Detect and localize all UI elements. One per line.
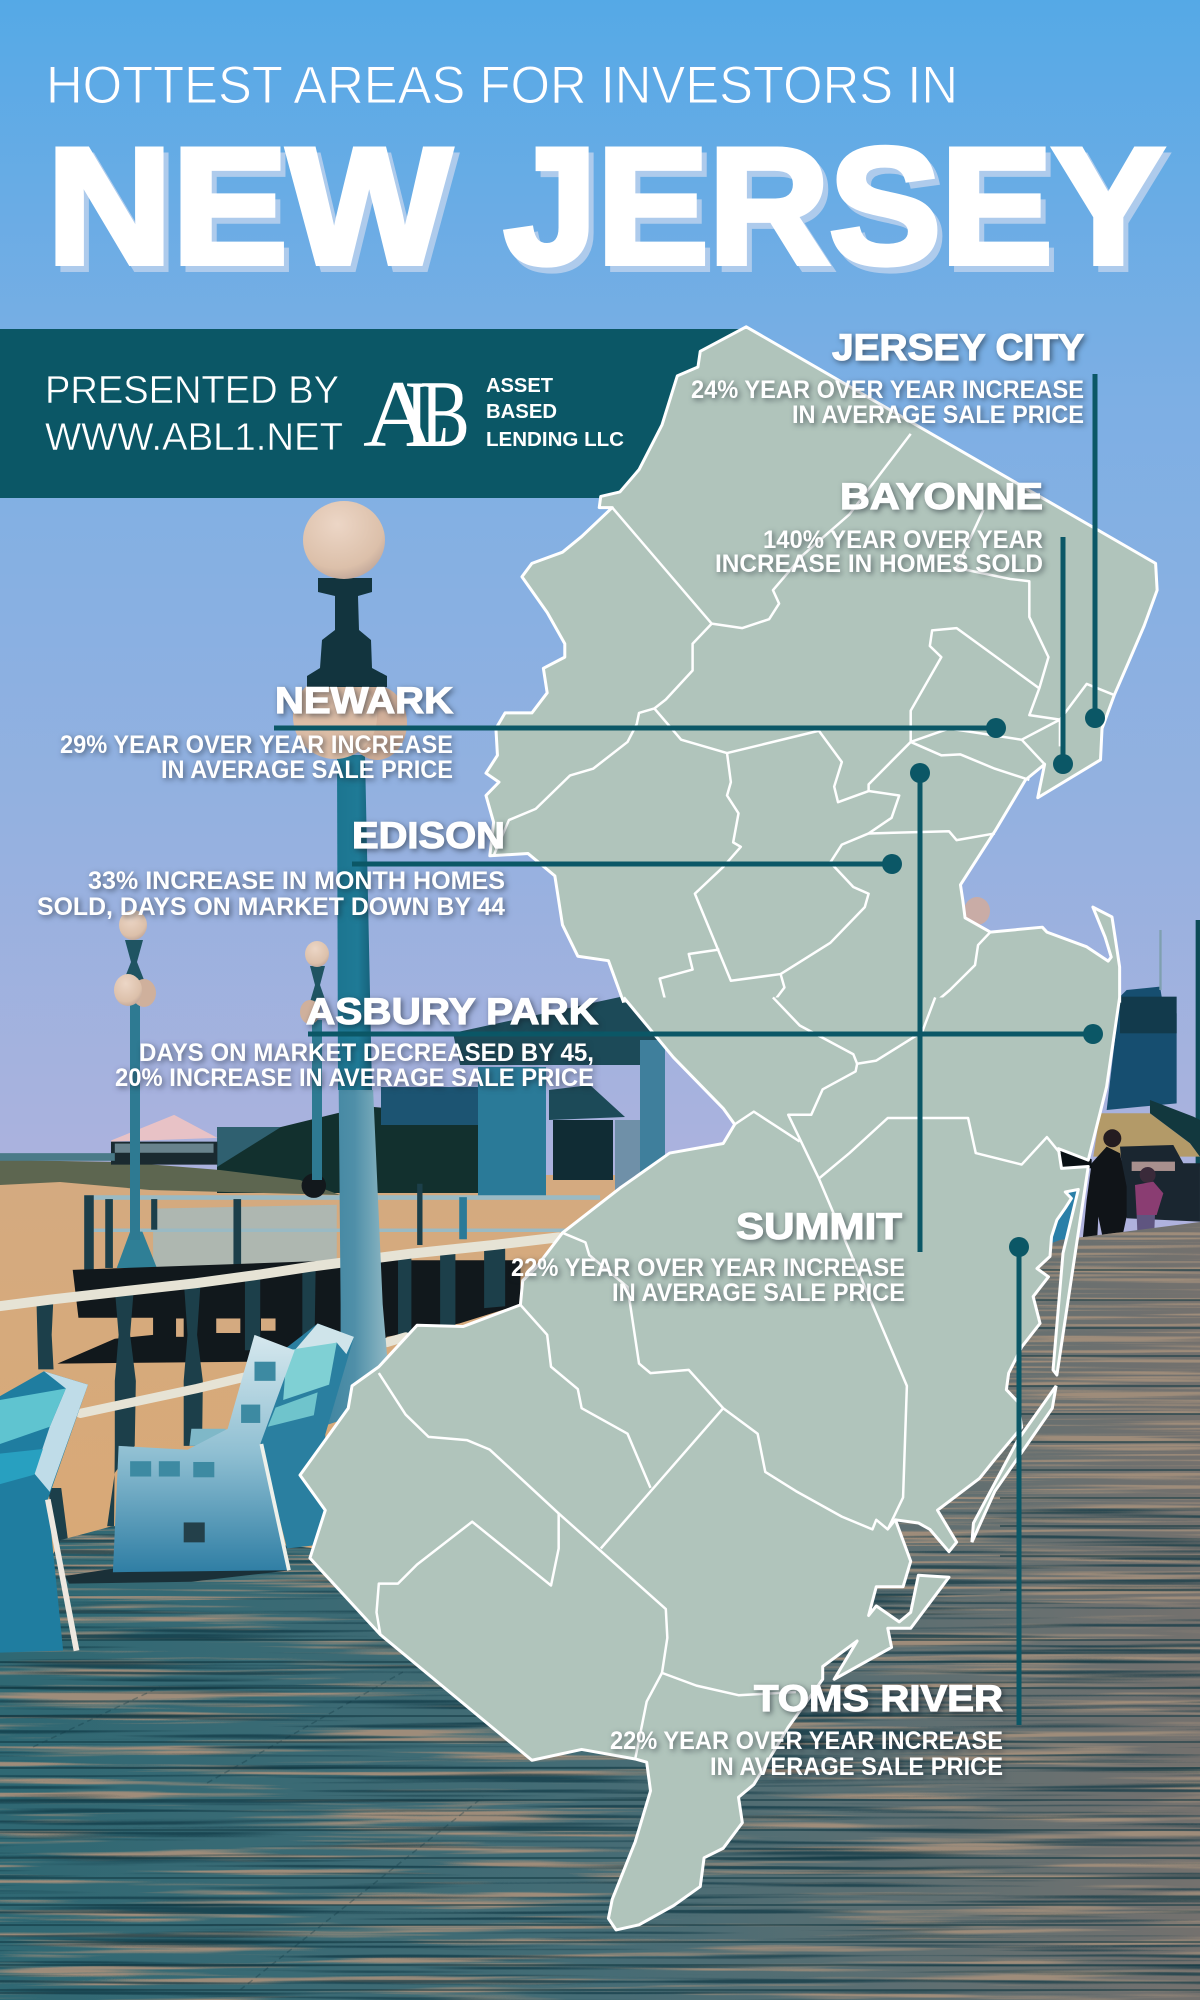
blue building [381,1087,481,1125]
inlet darkness [1057,1147,1092,1170]
label: Asbury Park [115,991,598,1092]
background photo: small lamp posts and beach scene [0,1115,600,1547]
Jersey City leader [1085,374,1105,728]
ramp wall [1150,1100,1200,1157]
Newark leader [274,718,1006,738]
logo company name [486,375,624,451]
beach tent [111,1115,217,1165]
front railing [0,1237,559,1413]
low building row [217,1127,347,1167]
logo monogram [363,361,470,467]
title heading [46,56,1169,304]
main lamp lower part [321,1090,387,1427]
label: Toms River: IN AVERAGE SALE PRICE [710,1753,1003,1781]
label: Jersey City: IN AVERAGE SALE PRICE [792,401,1084,429]
northern counties [486,327,1157,1003]
far plank texture [54,1227,1200,1600]
background photo: distant shore [0,1087,900,1575]
title line two [47,114,1164,298]
label: Edison: 33% INCREASE IN MONTH HOMES [88,867,505,895]
label: Newark [60,680,453,784]
Toms River leader [1009,1237,1029,1725]
label: Summit: 22% YEAR OVER YEAR INCREASE [511,1254,905,1282]
dune grass [0,1160,340,1195]
logo monogram: B [420,361,470,467]
presented by text: PRESENTED BY [45,369,339,412]
small lamp: middle [300,941,329,1180]
label: Edison: SOLD, DAYS ON MARKET DOWN BY 44 [37,893,505,921]
background photo: sky [0,0,1200,1600]
label: Jersey City [691,327,1084,429]
label: Bayonne [715,476,1043,578]
rear bench [189,1323,354,1548]
title line two: NEW [47,114,451,298]
label: Jersey City: 24% YEAR OVER YEAR INCREASE [691,376,1084,404]
label: Bayonne: INCREASE IN HOMES SOLD [715,550,1043,578]
label: Newark: NEWARK [275,680,453,721]
man walking [1082,1129,1127,1257]
presented by text: WWW.ABL1.NET [45,416,343,459]
sand [0,1175,900,1575]
label: Summit [511,1206,905,1307]
logo company name: BASED [486,401,557,423]
child walking [1135,1167,1163,1255]
southern county borders [377,997,1060,1759]
parked cars [1120,1145,1200,1222]
background photo: right side scene [1052,920,1200,1257]
main lamp post column [337,755,372,1090]
far fence [0,1153,115,1161]
label: Jersey City: JERSEY CITY [832,327,1084,368]
left bench [0,1371,88,1653]
Summit leader [910,763,930,1252]
connector lines and dots [274,374,1105,1725]
front railing posts [36,1240,505,1547]
logo monogram: A [363,361,435,467]
logo company name: LENDING LLC [486,429,624,451]
plank shading [0,1500,1200,2000]
label: Summit: IN AVERAGE SALE PRICE [612,1279,905,1307]
barrier island [972,1386,1056,1542]
top globe [303,501,385,579]
Bayonne leader [1053,537,1073,774]
label: Toms River: 22% YEAR OVER YEAR INCREASE [610,1727,1003,1755]
dark pier deck [57,1260,520,1364]
label: Bayonne: 140% YEAR OVER YEAR [763,526,1043,554]
antenna and mast [1159,920,1200,1167]
label: Newark: IN AVERAGE SALE PRICE [161,756,453,784]
label: Asbury Park: ASBURY PARK [306,991,598,1032]
small lamp: far left [114,910,156,1240]
Asbury Park leader [308,1024,1103,1044]
main lamp head [293,501,407,760]
front bench [113,1335,295,1572]
label: Summit: SUMMIT [736,1206,902,1247]
ramp [1093,1113,1200,1157]
blue figure in gap [1052,1189,1078,1253]
bench shadow [65,1568,291,1584]
ornate collar [307,578,387,687]
southern counties [300,997,1120,1930]
northern county borders [494,434,1114,1003]
label: Edison: EDISON [352,815,505,856]
label: Asbury Park: DAYS ON MARKET DECREASED BY 45, [139,1039,594,1067]
tower building [1107,987,1177,1110]
background photo: benches [0,1323,354,1653]
title line two: JERSEY [504,114,1164,298]
near plank texture [0,1600,1200,2000]
rear railing and benches [84,1173,600,1272]
label: Bayonne: BAYONNE [840,476,1043,517]
label: Asbury Park: 20% INCREASE IN AVERAGE SALE PRICE [115,1064,594,1092]
map of New Jersey [300,327,1157,1930]
logo monogram: L [405,361,450,467]
label: Toms River [610,1678,1003,1781]
background photo: gazebo [453,997,665,1197]
label: Toms River: TOMS RIVER [754,1678,1003,1719]
sand gaps under deck [176,1318,276,1337]
label: Edison [37,815,505,921]
boardwalk deck [0,1200,1200,2000]
tree line [217,1107,478,1193]
small lamp base [117,1232,157,1268]
title shadow: JERSEY [509,120,1169,304]
presented by text [45,369,343,459]
label: Newark: 29% YEAR OVER YEAR INCREASE [60,731,453,759]
logo company name: ASSET [486,375,553,397]
title line one: HOTTEST AREAS FOR INVESTORS IN [46,56,958,115]
Edison leader [352,854,902,874]
dark plank seams [0,1270,1200,1990]
presented-by banner [0,329,740,498]
distant right lamp globe [964,897,990,925]
title shadow [52,120,1169,304]
title shadow: NEW [52,120,456,304]
lower globes [347,686,407,760]
